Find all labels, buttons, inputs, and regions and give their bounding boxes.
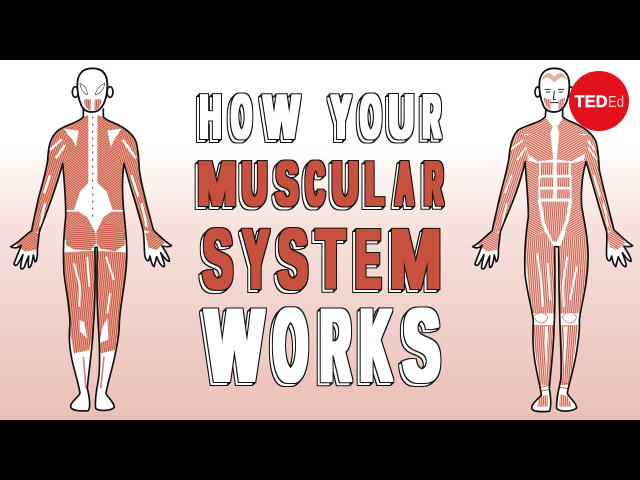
left chest muscle [523, 131, 553, 162]
pelvic white line [539, 200, 571, 243]
infographic canvas [0, 60, 640, 420]
title line: HOW YOUR: Y [332, 83, 350, 152]
facial features [545, 89, 564, 103]
title line: WORKS: K [361, 288, 391, 404]
left thigh muscles [523, 232, 555, 313]
shin highlight [545, 327, 567, 380]
right arm muscles [584, 132, 614, 232]
spine [83, 115, 103, 185]
right hand muscles [145, 231, 165, 250]
left shin muscles [532, 325, 553, 385]
title line: WORKS: O [274, 288, 307, 404]
title line: HOW YOUR: O [361, 83, 381, 152]
title line: MUSCULAR: U [242, 150, 267, 219]
right hip muscles [96, 212, 127, 240]
title line: SYSTEM: S [203, 212, 232, 306]
left oblique muscles [525, 160, 545, 239]
back figure body outline [11, 108, 172, 411]
infographic canvas: R [425, 150, 443, 219]
title line: MUSCULAR: M [198, 150, 236, 219]
arm white fibres [502, 140, 608, 227]
knee caps [533, 312, 577, 323]
title line: HOW YOUR: W [264, 83, 299, 152]
title line: HOW YOUR: H [200, 83, 221, 152]
calf highlights [79, 318, 109, 343]
gradient background panel [0, 60, 640, 420]
left hip muscles [63, 212, 95, 240]
back figure neck muscles [84, 99, 102, 110]
logo wordmark: TED [574, 93, 608, 111]
front figure head [539, 68, 569, 112]
title line: MUSCULAR: C [306, 150, 324, 219]
right calf muscles [99, 326, 118, 354]
title line: SYSTEM: T [317, 212, 345, 306]
title line: SYSTEM: Y [243, 212, 269, 306]
back figure ears [72, 87, 113, 97]
left thigh muscles [64, 250, 94, 324]
title line: SYSTEM: M [390, 212, 442, 306]
left back muscles [56, 115, 88, 210]
neck muscles [524, 118, 587, 134]
front figure body outline [473, 108, 633, 412]
foot muscles [537, 395, 572, 407]
figure: back view of the body [10, 67, 172, 412]
title line: WORKS: W [206, 288, 263, 404]
right chest muscle [557, 131, 588, 162]
title line: MUSCULAR: A [396, 150, 413, 219]
title line: SYSTEM: S [278, 212, 308, 306]
arm white fibres [40, 139, 147, 227]
hand muscles [478, 231, 626, 252]
right back muscles [97, 115, 128, 210]
title line: MUSCULAR [198, 150, 443, 219]
forehead muscle [542, 73, 567, 83]
right oblique muscles [563, 160, 586, 240]
right gluteal muscle [96, 223, 125, 251]
logo wordmark suffix: Ed [608, 94, 624, 111]
title: How your muscular system works [198, 83, 443, 404]
title line: WORKS: S [404, 288, 440, 404]
front figure ears [535, 87, 574, 97]
title line: SYSTEM [203, 212, 442, 306]
title line: HOW YOUR: U [389, 83, 414, 152]
figure: front view of the body [472, 67, 634, 412]
bottom letterbox bar [0, 420, 640, 480]
title line: MUSCULAR: U [332, 150, 358, 219]
spine vertebra dots [92, 116, 94, 217]
TED-Ed logo badge [569, 71, 629, 131]
title line: WORKS [206, 288, 440, 404]
left hand muscles [17, 231, 41, 252]
title line: HOW YOUR [200, 83, 440, 152]
right thigh muscles [98, 250, 126, 324]
thigh white fibres [537, 253, 577, 307]
back figure head [77, 68, 107, 112]
right thigh muscles [559, 232, 588, 313]
title line: HOW YOUR: O [232, 83, 251, 152]
left arm muscles [30, 132, 68, 233]
cheek and chin muscles [543, 97, 565, 109]
left calf muscles [70, 326, 92, 354]
lower abdomen V [540, 202, 570, 242]
top letterbox bar [0, 0, 640, 60]
hip highlight [66, 245, 67, 246]
shoulder blade highlights [64, 129, 122, 147]
infographic canvas: R [423, 83, 440, 152]
title line: MUSCULAR: L [366, 150, 383, 219]
left gluteal muscle [66, 224, 96, 251]
right arm muscles [118, 132, 155, 233]
ankle bands [540, 382, 571, 391]
thigh white fibres [74, 257, 114, 313]
title line: SYSTEM: E [356, 212, 381, 306]
back figure head outlines [80, 83, 105, 95]
abdominal muscles [539, 162, 571, 199]
front figure muscles [474, 118, 631, 411]
title line: WORKS: R [321, 288, 350, 404]
left arm muscles [490, 128, 528, 233]
back figure muscles [12, 115, 170, 410]
lower leg tendons [83, 357, 104, 388]
title line: MUSCULAR: S [276, 150, 298, 219]
right shin muscles [559, 325, 578, 385]
